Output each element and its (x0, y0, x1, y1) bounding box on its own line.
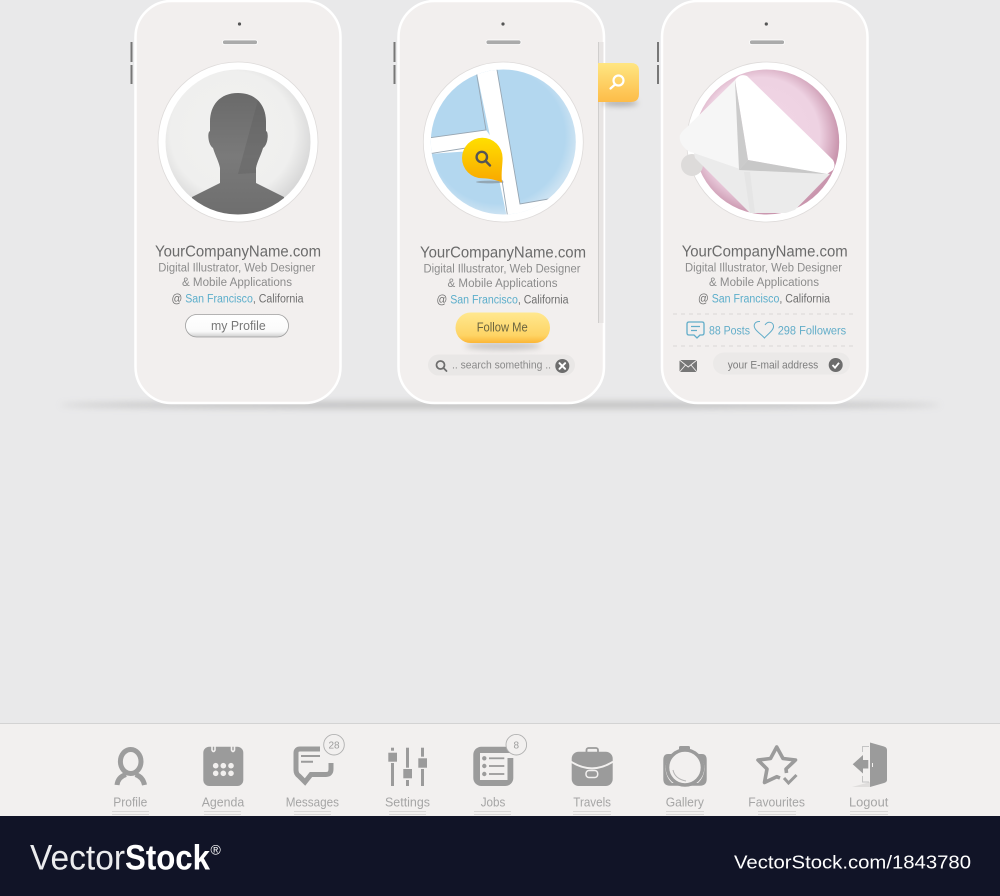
envelope fold shadows (735, 80, 748, 170)
avatar circle (158, 62, 318, 222)
yellow search tab (598, 63, 639, 106)
person silhouette (192, 93, 284, 220)
speaker (222, 40, 258, 44)
nav item: profile: Profile (113, 795, 147, 810)
phone side buttons (657, 42, 659, 84)
map roads (430, 70, 548, 214)
nav item: profile (113, 750, 147, 810)
role description (158, 263, 315, 289)
search icon (436, 361, 446, 371)
followers stat: 298 Followers (778, 326, 846, 338)
camera dot (238, 22, 241, 26)
camera dot (765, 22, 768, 26)
check icon (829, 358, 843, 372)
posts stat (687, 322, 750, 338)
phone: contact (657, 1, 868, 403)
followers stat (754, 321, 846, 338)
heart icon (754, 321, 774, 338)
nav item: gallery (663, 746, 707, 810)
watermark footer band (0, 816, 1000, 896)
camera dot (501, 22, 505, 26)
nav item: gallery: Gallery (666, 795, 704, 810)
phone body (398, 1, 604, 403)
badge 28: 28 (328, 740, 340, 751)
nav item: agenda (202, 746, 245, 810)
search field (428, 354, 575, 376)
mail icon (680, 360, 697, 372)
clear icon (555, 359, 569, 373)
role description: Digital Illustrator, Web Designer (424, 264, 581, 276)
phone side buttons (394, 42, 396, 84)
nav item: favourites (748, 747, 805, 810)
role description: Digital Illustrator, Web Designer (685, 263, 842, 275)
nav item: favourites: Favourites (748, 795, 805, 810)
nav item: agenda: Agenda (202, 795, 245, 810)
floor shadow under phones (60, 402, 940, 408)
company name: YourCompanyName.com (420, 245, 586, 262)
envelope body (687, 150, 830, 213)
phone body (662, 1, 868, 403)
image id url: VectorStock.com/1843780 (734, 851, 971, 872)
role description: & Mobile Applications (709, 277, 819, 289)
location: @ San Francisco, California (436, 295, 569, 307)
role description: & Mobile Applications (448, 278, 558, 290)
company name: YourCompanyName.com (155, 244, 321, 261)
envelope circle (680, 62, 847, 222)
my profile button: my Profile (211, 318, 266, 333)
envelope left flap (680, 80, 740, 169)
phone: profile (130, 1, 340, 403)
nav item: messages: Messages (286, 795, 339, 810)
email field: your E-mail address (728, 360, 819, 372)
badge 8: 8 (514, 740, 520, 751)
map pin (462, 138, 504, 183)
phone side buttons (130, 42, 132, 84)
email field (713, 352, 850, 374)
role description: Digital Illustrator, Web Designer (158, 263, 315, 275)
envelope shadow (681, 154, 703, 176)
map circle (423, 62, 583, 232)
nav item: jobs (473, 734, 527, 810)
role description: & Mobile Applications (182, 277, 292, 289)
nav item: settings: Settings (385, 795, 430, 810)
follow me button (456, 312, 550, 350)
nav item: logout (849, 742, 889, 810)
follow me button: Follow Me (477, 321, 528, 335)
posts stat: 88 Posts (709, 326, 750, 338)
nav item: travels: Travels (573, 795, 611, 810)
nav item: travels (571, 748, 613, 810)
speaker (486, 40, 521, 44)
envelope top flap (735, 75, 834, 174)
company name: YourCompanyName.com (682, 244, 848, 261)
speaker (750, 40, 784, 44)
nav item: jobs: Jobs (481, 795, 506, 810)
my profile button (186, 314, 288, 337)
search field: .. search something .. (452, 360, 551, 372)
nav item: settings (385, 748, 430, 810)
posts icon (687, 322, 704, 338)
VectorStock logo: ® (210, 842, 222, 858)
side drawer edge (598, 42, 604, 323)
phone body (136, 1, 340, 403)
bottom navigation bar (0, 723, 1000, 816)
role description (424, 264, 581, 290)
nav item: messages (286, 734, 344, 810)
nav item: logout: Logout (849, 795, 889, 810)
VectorStock logo (30, 838, 222, 877)
phone: map (394, 1, 639, 403)
VectorStock logo: Vector (30, 838, 125, 877)
VectorStock logo: Stock (125, 838, 210, 877)
location: @ San Francisco, California (172, 294, 304, 306)
location: @ San Francisco, California (698, 294, 831, 306)
role description (685, 263, 842, 289)
pin magnifier (477, 152, 490, 166)
